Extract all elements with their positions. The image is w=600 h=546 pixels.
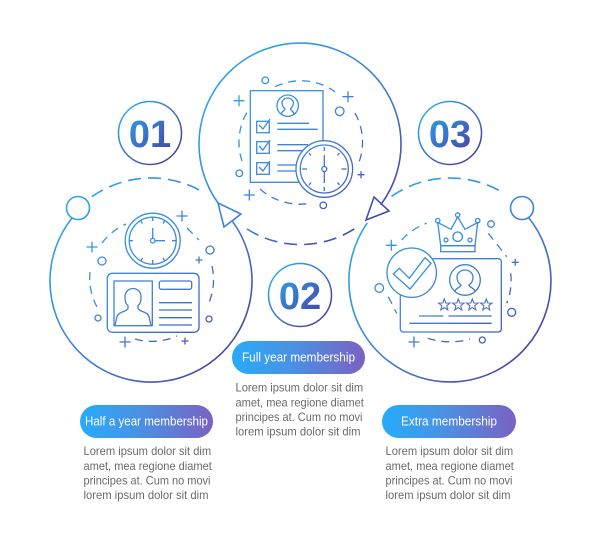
text block: extra description: lorem ipsum dolor sit dim bbox=[386, 488, 510, 502]
text block: half a year description: principes at. Cum no movi bbox=[84, 474, 210, 488]
text block: full year description: amet, mea regione diamet bbox=[236, 396, 364, 410]
arrowhead 2 bbox=[366, 197, 389, 220]
text block: extra description: Lorem ipsum dolor sit dim bbox=[386, 444, 513, 458]
text block: half a year description: Lorem ipsum dolor sit dim bbox=[84, 444, 211, 458]
text block: half a year description: amet, mea regione diamet bbox=[84, 459, 212, 473]
text block: full year description: Lorem ipsum dolor sit dim bbox=[236, 380, 363, 394]
text block: half a year description: lorem ipsum dolor sit dim bbox=[84, 488, 208, 502]
pill heading: full year membership: Full year membership bbox=[242, 350, 355, 364]
left orbit ring bbox=[50, 178, 252, 382]
icon: checklist and clock bbox=[234, 77, 364, 209]
panel: step 03 extra membership bbox=[349, 102, 551, 382]
text block: extra description: amet, mea regione diamet bbox=[386, 459, 514, 473]
icon: rated profile card with crown bbox=[375, 213, 519, 348]
icon: clock and ID card bbox=[86, 210, 214, 348]
right orbit ring bbox=[349, 178, 551, 382]
pill heading: full year membership bbox=[232, 341, 365, 374]
number badge 02: 02 bbox=[279, 276, 321, 318]
pill heading: extra membership: Extra membership bbox=[401, 414, 497, 428]
icon: four rating stars bbox=[439, 299, 492, 310]
number badge 01 bbox=[118, 102, 182, 164]
pill heading: extra membership bbox=[382, 405, 516, 438]
arrowhead 1 bbox=[218, 203, 241, 227]
text block: half a year description bbox=[84, 444, 212, 502]
text block: full year description: lorem ipsum dolor sit dim bbox=[236, 424, 360, 438]
panel: step 01 half a year membership bbox=[50, 102, 252, 382]
number badge 03 bbox=[418, 102, 482, 164]
middle orbit ring bbox=[199, 43, 401, 245]
panel: step 02 full year membership bbox=[199, 43, 401, 327]
text block: extra description: principes at. Cum no movi bbox=[386, 474, 512, 488]
pill heading: half a year membership: Half a year membership bbox=[85, 414, 208, 428]
number badge 01: 01 bbox=[129, 114, 171, 156]
pill heading: half a year membership bbox=[80, 405, 213, 438]
number badge 03: 03 bbox=[429, 114, 471, 156]
text block: extra description bbox=[386, 444, 514, 502]
text block: full year description: principes at. Cum no movi bbox=[236, 410, 362, 424]
text block: full year description bbox=[236, 380, 364, 438]
number badge 02 bbox=[268, 264, 332, 326]
